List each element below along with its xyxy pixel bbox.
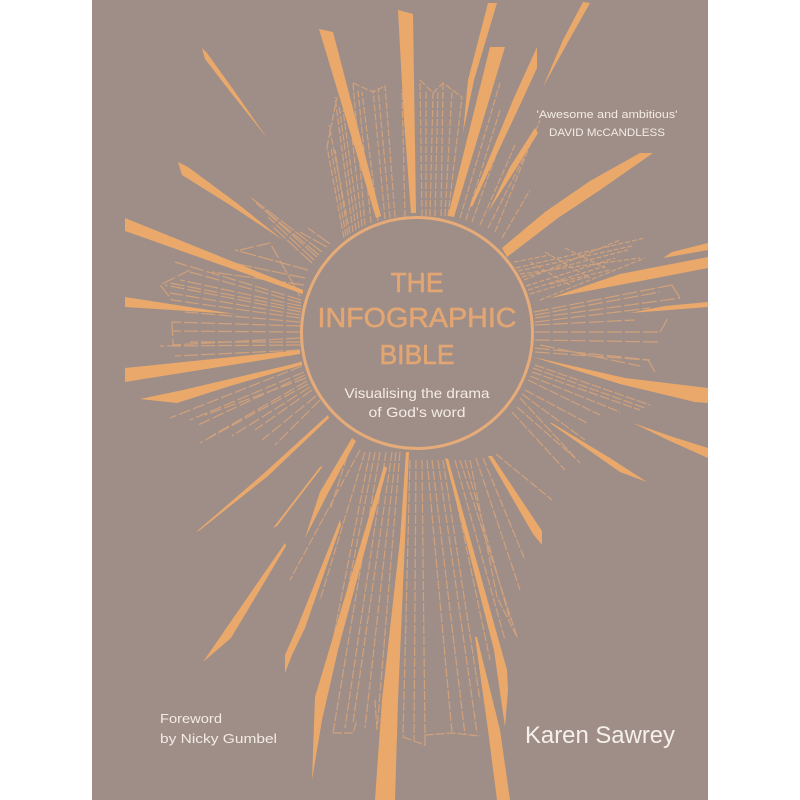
ray: far top right xyxy=(543,2,590,87)
ray: top right diagonal xyxy=(470,47,537,207)
ray: right 3 xyxy=(630,302,708,313)
book cover panel xyxy=(92,0,708,800)
ray: top right wide xyxy=(448,47,505,217)
quote text: 'Awesome and ambitious' xyxy=(536,109,678,121)
title line 3: BIBLE xyxy=(380,339,454,370)
ray: left 1 xyxy=(125,218,303,294)
ray: short top right xyxy=(488,128,538,212)
page lines: bottom fan xyxy=(403,454,552,745)
subtitle line 2: of God's word xyxy=(368,404,466,420)
ray: bottom right lower xyxy=(475,637,510,800)
title line 1: THE xyxy=(390,267,444,298)
ray: top centre left xyxy=(398,10,416,213)
page lines: bottom left fan xyxy=(290,447,400,733)
endorsement quote xyxy=(536,109,678,139)
ray: left 4 xyxy=(140,362,302,403)
subtitle xyxy=(344,385,490,420)
page lines: lower right fan xyxy=(512,365,650,470)
ray: left 2 xyxy=(125,297,235,314)
foreword line 2: by Nicky Gumbel xyxy=(160,731,277,746)
ray: bottom centre xyxy=(375,452,409,800)
ray: right 4 xyxy=(533,357,708,403)
ray: top left long xyxy=(319,29,381,218)
ray: lower left 3 xyxy=(305,438,356,538)
author name: Karen Sawrey xyxy=(525,722,675,749)
ray: right 5 xyxy=(633,423,708,458)
ray: upper left xyxy=(178,162,283,240)
title xyxy=(318,267,516,370)
foreword credit xyxy=(160,711,277,746)
page lines: left fan xyxy=(160,243,301,356)
ray: top right thin xyxy=(463,3,497,133)
ray: right 1 xyxy=(663,243,708,258)
ray: left 3 xyxy=(125,350,300,382)
fine book page lines xyxy=(160,80,680,745)
page lines: lower left fan xyxy=(170,362,320,445)
central circle xyxy=(302,218,532,448)
page lines: upper left fan xyxy=(212,197,330,285)
title line 2: INFOGRAPHIC xyxy=(318,302,516,333)
page lines: right fan xyxy=(534,285,680,372)
ray: lower left 5 xyxy=(285,520,341,673)
quote author: DAVID McCANDLESS xyxy=(549,127,665,139)
ray: bottom left long xyxy=(312,466,387,780)
ray: lower right short xyxy=(488,456,542,545)
ray: lower right long xyxy=(550,423,647,482)
page lines: upper right hatch xyxy=(514,238,645,300)
ray: lower left 4 xyxy=(203,543,286,662)
ray: right 2 xyxy=(550,257,708,298)
foreword line 1: Foreword xyxy=(160,711,222,726)
page lines: top right fan xyxy=(420,80,540,238)
ray: far upper left xyxy=(202,48,267,138)
subtitle line 1: Visualising the drama xyxy=(344,385,490,401)
page lines: top fan xyxy=(327,83,405,238)
ray: right upper diagonal xyxy=(502,153,653,257)
ray: lower left 2 xyxy=(273,466,323,528)
ray: lower left 1 xyxy=(196,415,329,532)
ray: bottom right long xyxy=(445,458,508,727)
sunburst rays xyxy=(125,2,708,800)
